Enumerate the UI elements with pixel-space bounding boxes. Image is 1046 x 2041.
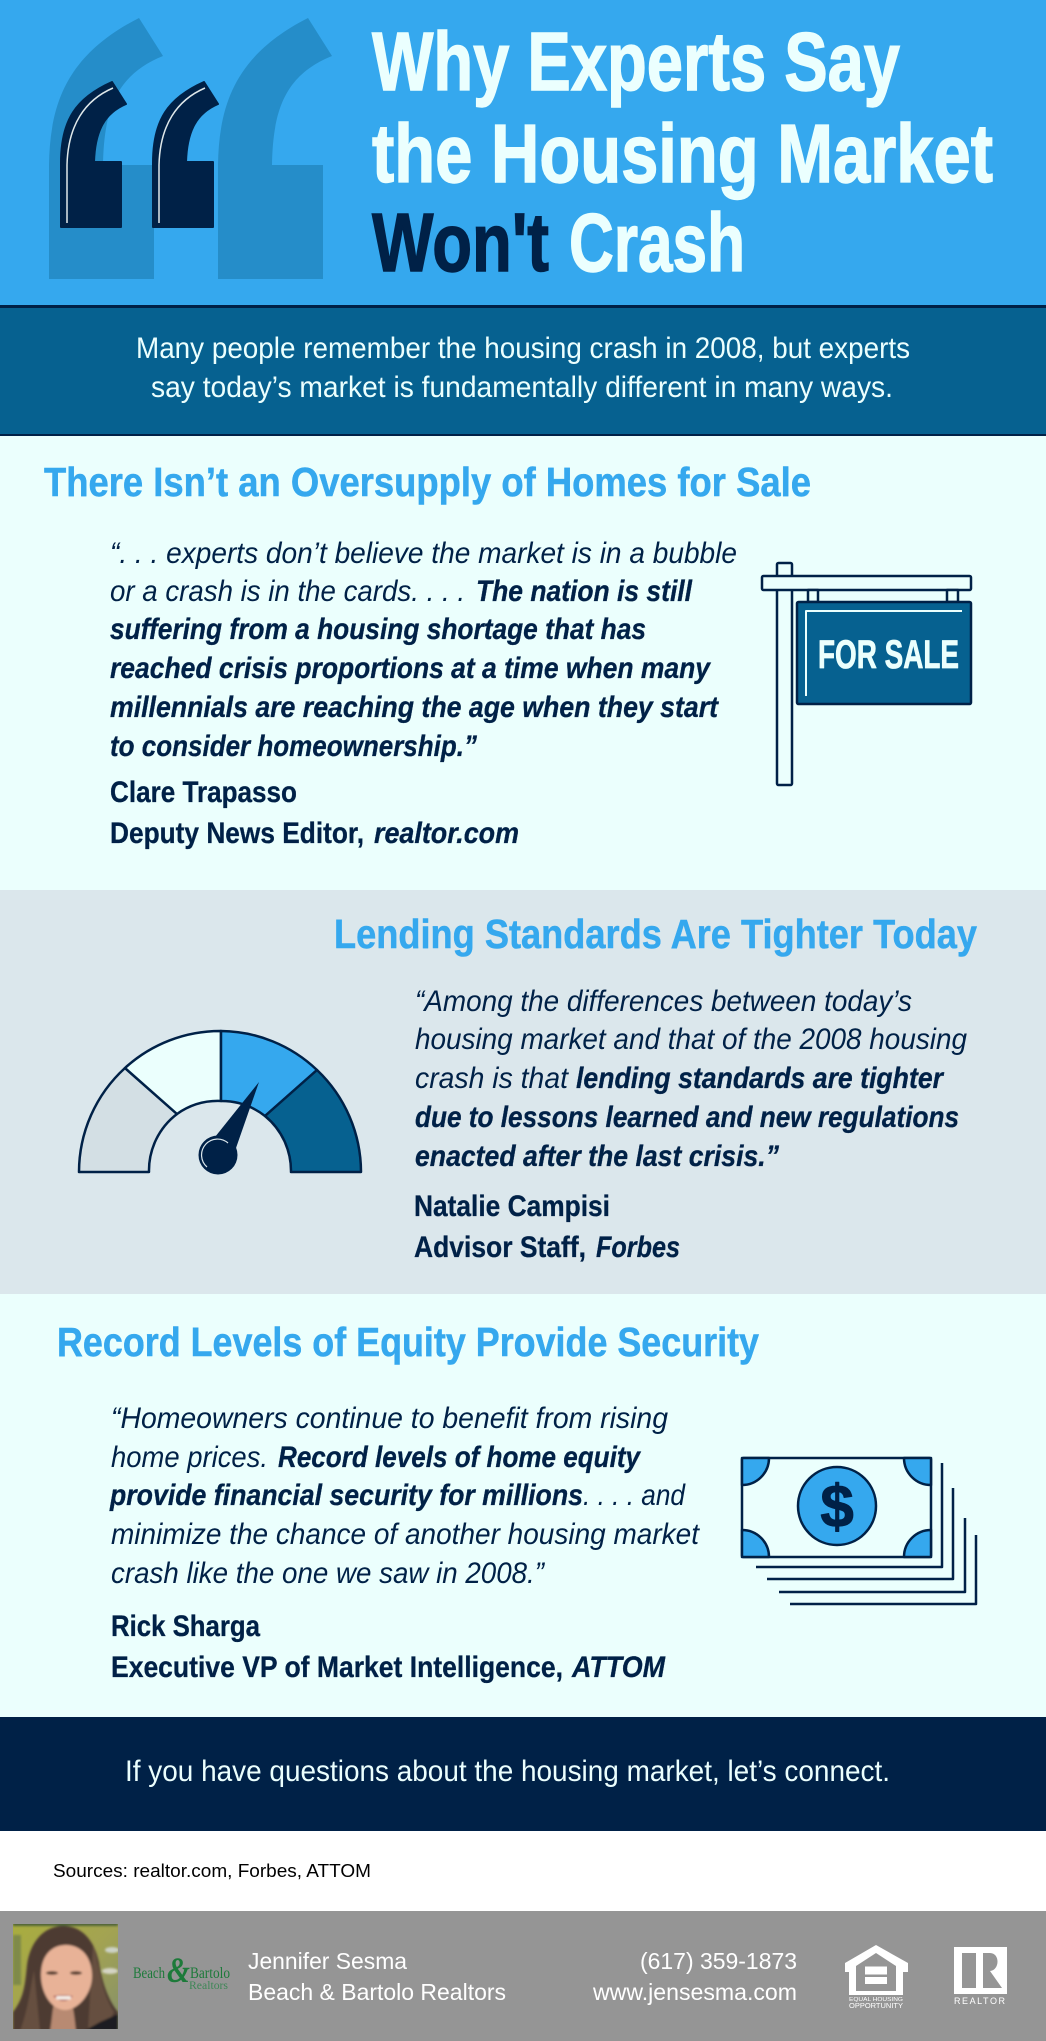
panel: call to action <box>0 1717 1046 1831</box>
panel: agent footer <box>0 1911 1046 2041</box>
quote: Natalie Campisi: crash is that <box>415 1062 570 1095</box>
attribution: Rick Sharga <box>111 1610 666 1684</box>
intro text: Many people remember the housing crash in 2008, but experts <box>136 332 910 365</box>
quote: Natalie Campisi: lending standards are tighter <box>576 1062 945 1095</box>
attribution: Clare Trapasso: realtor.com <box>374 817 519 850</box>
icon: stack of money: $ <box>820 1473 854 1540</box>
quote: Clare Trapasso: millennials are reaching the age when they start <box>110 691 720 724</box>
logo: Beach & Bartolo Realtors <box>133 1950 230 1992</box>
quote: Natalie Campisi: “Among the differences between today’s <box>415 985 912 1018</box>
agent contact details: www.jensesma.com <box>592 1979 797 2005</box>
logo: Beach & Bartolo Realtors: Realtors <box>189 1978 228 1992</box>
panel: oversupply section <box>0 436 1046 890</box>
attribution: Rick Sharga: ATTOM <box>571 1651 666 1684</box>
panel: lending standards section <box>0 890 1046 1294</box>
icon: large background quotation marks <box>49 18 332 279</box>
attribution: Clare Trapasso: Clare Trapasso <box>110 776 297 809</box>
icon: equal housing opportunity <box>845 1945 908 2010</box>
attribution: Clare Trapasso: Deputy News Editor, <box>110 817 364 850</box>
quote: Rick Sharga: Record levels of home equity <box>278 1441 641 1474</box>
attribution: Natalie Campisi: Natalie Campisi <box>414 1190 610 1223</box>
icon: gauge <box>79 1031 361 1174</box>
intro text <box>136 332 910 404</box>
heading: equity: Record Levels of Equity Provide Security <box>57 1319 759 1365</box>
quote: Clare Trapasso: reached crisis proportions at a time when many <box>110 652 711 685</box>
call to action text: If you have questions about the housing market, let’s connect. <box>125 1755 890 1788</box>
icon: for sale sign: FOR SALE <box>818 633 959 677</box>
quote: Clare Trapasso: The nation is still <box>476 575 693 608</box>
heading: oversupply: There Isn’t an Oversupply of Homes for Sale <box>44 459 811 505</box>
icon: navy quotation marks <box>61 82 218 227</box>
panel: equity section <box>0 1294 1046 1717</box>
quote: Rick Sharga: crash like the one we saw in 2008.” <box>111 1557 546 1590</box>
attribution: Rick Sharga: Executive VP of Market Intelligence, <box>111 1651 563 1684</box>
quote: Clare Trapasso <box>110 537 737 763</box>
icon: realtor logo: REALTOR <box>954 1996 1006 2006</box>
quote: Clare Trapasso: suffering from a housing shortage that has <box>110 613 646 646</box>
icon: equal housing opportunity: OPPORTUNITY <box>849 2003 903 2010</box>
quote: Clare Trapasso: or a crash is in the cards. . . . <box>110 575 465 608</box>
quote: Natalie Campisi <box>415 985 967 1173</box>
attribution: Natalie Campisi: Advisor Staff, <box>414 1231 586 1264</box>
quote: Natalie Campisi: enacted after the last crisis.” <box>415 1140 779 1173</box>
logo: Beach & Bartolo Realtors: Bartolo <box>190 1965 230 1982</box>
quote: Rick Sharga: . . . . and <box>583 1479 686 1512</box>
icon: for sale sign <box>762 563 971 785</box>
attribution: Natalie Campisi: Forbes <box>596 1231 680 1264</box>
attribution: Clare Trapasso <box>110 776 519 850</box>
logo: Beach & Bartolo Realtors: Beach <box>133 1965 165 1982</box>
agent name and company <box>248 1948 506 2005</box>
agent name and company: Beach & Bartolo Realtors <box>248 1979 506 2005</box>
attribution: Natalie Campisi <box>414 1190 680 1264</box>
title: Why Experts Say <box>372 15 900 108</box>
panel: intro band <box>0 305 1046 436</box>
agent contact details: (617) 359-1873 <box>640 1948 797 1974</box>
agent name and company: Jennifer Sesma <box>248 1948 408 1974</box>
intro text: say today’s market is fundamentally different in many ways. <box>151 371 893 404</box>
agent contact details <box>592 1948 797 2005</box>
quote: Rick Sharga: minimize the chance of another housing market <box>111 1518 701 1551</box>
icon: realtor logo <box>954 1947 1007 2006</box>
title: Crash <box>569 196 745 289</box>
quote: Rick Sharga <box>109 1402 701 1590</box>
quote: Natalie Campisi: due to lessons learned and new regulations <box>415 1101 959 1134</box>
quote: Clare Trapasso: “. . . experts don’t believe the market is in a bubble <box>110 537 737 570</box>
heading: lending standards: Lending Standards Are Tighter Today <box>334 911 977 957</box>
quote: Rick Sharga: “Homeowners continue to benefit from rising <box>111 1402 668 1435</box>
quote: Rick Sharga: provide financial security for millions <box>109 1479 583 1512</box>
icon: equal housing opportunity: EQUAL HOUSING <box>849 1997 903 2003</box>
photo: agent portrait <box>13 1922 119 2031</box>
sources: Sources: realtor.com, Forbes, ATTOM <box>53 1860 371 1881</box>
logo: Beach & Bartolo Realtors: & <box>167 1950 190 1990</box>
quote: Natalie Campisi: housing market and that of the 2008 housing <box>415 1023 967 1056</box>
icon: stack of money <box>742 1458 976 1604</box>
title: Won't <box>372 196 549 289</box>
quote: Clare Trapasso: to consider homeownership.” <box>110 730 477 763</box>
panel: header <box>0 0 1046 306</box>
quote: Rick Sharga: home prices. <box>111 1441 268 1474</box>
attribution: Rick Sharga: Rick Sharga <box>111 1610 260 1643</box>
title <box>372 15 993 289</box>
